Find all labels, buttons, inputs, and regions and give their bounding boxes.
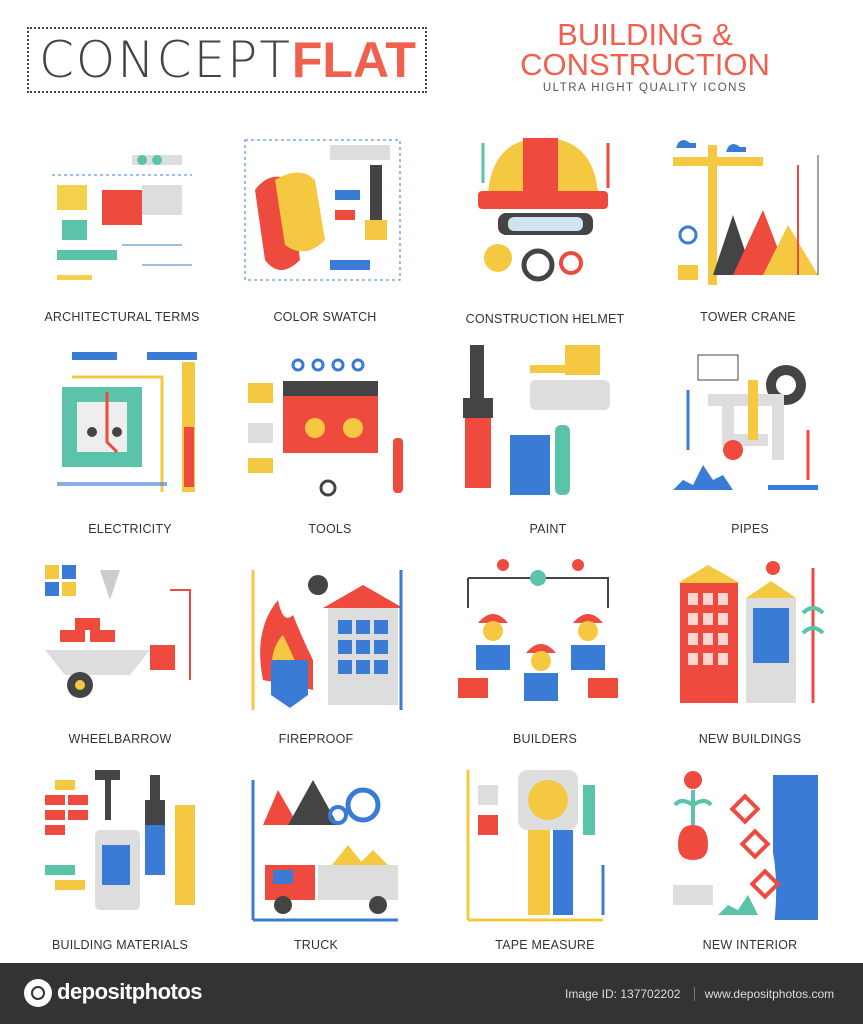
label: ARCHITECTURAL TERMS [44,310,200,324]
icon: tools [248,358,403,496]
label: BUILDING MATERIALS [52,938,188,952]
label: WHEELBARROW [69,732,171,746]
icon: building materials [45,770,195,910]
label: COLOR SWATCH [273,310,377,324]
footer [0,963,863,1024]
footer text: Image ID: 137702202 www.depositphotos.com [565,987,834,1001]
icon: color swatch [244,140,400,280]
header: title [520,17,770,94]
footer logo: depositphotos [57,979,202,1004]
label: PIPES [731,522,769,536]
icon: new interior [673,771,818,920]
label: TOOLS [308,522,352,536]
icon: fireproof [252,570,403,710]
icon: construction helmet [478,138,610,282]
label: ELECTRICITY [88,522,172,536]
icon: electricity [57,352,197,492]
label: TRUCK [294,938,338,952]
icon: tape measure [466,770,604,922]
label: CONSTRUCTION HELMET [466,312,624,326]
label: NEW BUILDINGS [699,732,801,746]
label: TOWER CRANE [700,310,796,324]
label: NEW INTERIOR [703,938,797,952]
header: title: CONSTRUCTION [520,47,770,82]
icon: architectural terms [52,155,192,280]
label: TAPE MEASURE [495,938,595,952]
icon: tower crane [673,140,818,285]
label: FIREPROOF [279,732,353,746]
header: title: ULTRA HIGHT QUALITY ICONS [543,82,747,94]
icon: pipes [673,354,818,490]
icon: builders [458,559,618,701]
header: title: BUILDING & [557,17,733,52]
icon: truck [252,780,398,922]
icon: new buildings [678,561,824,703]
header: concept flat logo: CONCEPTFLAT [39,31,416,89]
icon: paint [463,345,610,495]
icon: wheelbarrow [45,565,191,698]
label: BUILDERS [513,732,577,746]
label: PAINT [530,522,566,536]
